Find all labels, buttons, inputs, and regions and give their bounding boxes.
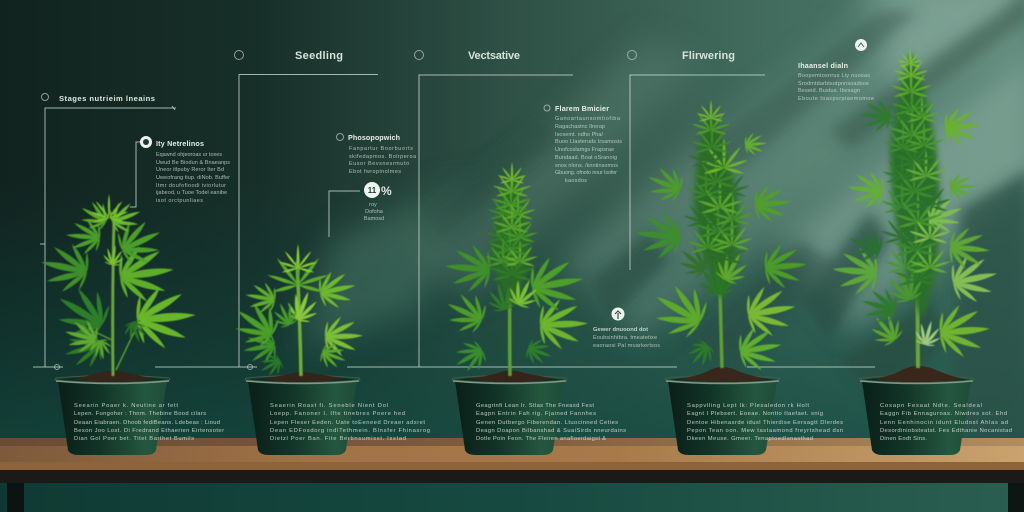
callout: percent stat: % <box>381 184 392 198</box>
callout: key nutrients <box>130 136 230 207</box>
callout: phosphorus: Eusor Bevsnesrmuto <box>349 161 409 167</box>
callout: lower flowering note: Gewer dnuoond dot <box>593 327 648 333</box>
callout: hormonal dialn: Eboute Ioaspsrpiaemomoe <box>798 96 874 102</box>
plant 4 <box>633 100 809 375</box>
pot text 5: Cosapn Fesaat Ndte. Sealdeal <box>880 403 982 409</box>
callout: hormonal dialn: Ihaansel dialn <box>798 61 848 70</box>
icon: badge <box>140 136 152 148</box>
callout: percent stat: Bamosd <box>364 216 384 222</box>
baseline rules <box>33 364 875 370</box>
pot text 3: Dotle Poin Feon. The Fleiren anafloerdaigst & <box>476 436 606 442</box>
callout: phosphorus: Fanpartur Boorbuorts <box>349 146 413 152</box>
callout: flower feeder: snos nlons. /knntinsomos <box>555 163 618 169</box>
callout: key nutrients: Uweofrang tiup. diNob. Buffer <box>156 175 230 181</box>
callout: phosphorus: Phosopopwich <box>348 133 400 142</box>
callout: flower feeder: Ganoartaunsomtiofiba <box>555 116 621 122</box>
pot text blocks <box>74 403 1012 442</box>
pot text 3: Deagn Doapon Bilbanshad & SuaiSirds nneurdains <box>476 428 626 434</box>
callout: flower feeder: Flarem Bmicier <box>555 104 609 113</box>
heading: vegetative <box>414 50 573 367</box>
pot 4 <box>665 367 780 455</box>
callout: key nutrients: Uwud Be Biodun & Bnaeanps <box>156 160 230 166</box>
callout: phosphorus: skifedapmos. Bolrperoa <box>349 154 417 160</box>
callout: percent stat: roy <box>369 202 377 208</box>
pot text 5 <box>880 403 1012 442</box>
pot 3 <box>452 370 567 455</box>
pot text 4: Dentoe Hibenasrde idusl Thierdise Eersagtt Dlerdes <box>687 420 843 426</box>
heading: vegetative: Vectsative <box>468 50 520 62</box>
pot text 3: Eagpn Entrin Fah rig. Fjained Fannhes <box>476 411 596 417</box>
callout: phosphorus <box>336 133 417 175</box>
plant 3 <box>439 162 589 379</box>
heading: stages nutrient needs: Stages nutrieim lneains <box>59 94 155 103</box>
guide lines and stage headings <box>33 50 875 370</box>
pot text 3: Genen Dutbergo Fiberendan. Ltuocinned Ceties <box>476 420 618 426</box>
callout: key nutrients: Eqawnd ohjeoroas ur toxes <box>156 152 222 158</box>
pots with soil <box>55 366 974 455</box>
heading: seedling: Seedling <box>295 50 343 62</box>
callout: hormonal dialn: Boopemtosnrus Liy nuosas <box>798 73 870 79</box>
pot text 4: Pepon Tean oon. Mew tastaamond freyrtshead dsn <box>687 428 843 434</box>
icon: white badge <box>612 308 624 320</box>
pot text 4: Eagnt I Plebsert. Eoeae. Nontio tlaefaet. snig <box>687 411 823 417</box>
callout: percent stat <box>329 182 392 237</box>
pot text 5: Desordiniobsteatst. Fes Edthanie Nocanistad <box>880 428 1012 434</box>
callout: phosphorus: Ebot fwropinolmes <box>349 169 401 175</box>
callout: key nutrients: Ity Netrelinos <box>156 139 204 148</box>
plant 1 <box>36 194 199 376</box>
callout: key nutrients: Itmr doufofioodi iviorlutur <box>156 183 226 189</box>
pot text 3: Geagrinfi Lean Ir. Stlas The Fneasd Fest <box>476 403 594 409</box>
callout: hormonal dialn: Beseid. Bustus. Ibvsagn <box>798 88 860 94</box>
pot text 5: Lenn Eenhinocin idunt Eludost Ahlas ad <box>880 420 1008 426</box>
pot text 1: Lepen. Fungoher : Thnm. Thebine Bood cilars <box>74 411 206 417</box>
pot text 4: Dkeen Meuse. Gmeer. Tenaptoedlsnasthad <box>687 436 813 442</box>
pot text 4 <box>687 403 843 442</box>
callout: percent stat: 11 <box>368 186 377 195</box>
heading: flowering <box>628 50 765 270</box>
heading: stages nutrient needs <box>40 94 176 367</box>
pot text 2 <box>270 403 430 442</box>
callout: hormonal dialn <box>798 39 874 102</box>
pot text 1: Beson Joo Lost. Di Fredrand Ethaerien Eirtensoter <box>74 428 224 434</box>
callout: flower feeder: Isosemt. ndho Pha/ <box>555 132 603 138</box>
pot 2 <box>245 372 360 455</box>
pot text 1: Dian Gol Poer bet. Titet Barthet Bumils <box>74 436 194 442</box>
heading: flowering: Flirwering <box>682 50 735 62</box>
pot text 2: Lepen Fleser Eeden. Uate toEeneed Dreaer adsret <box>270 420 425 426</box>
callout: key nutrients: Uneor itlpuby Reror Iter Bd <box>156 167 224 173</box>
callout: key nutrients: isot orctpunliaes <box>156 198 203 204</box>
callout: percent stat: Dofoha <box>365 209 384 215</box>
pot 5 <box>859 366 974 455</box>
callout: flower feeder <box>544 104 622 184</box>
pot text 2: Loepp. Fanoner I. Ifte tinebres Poere hed <box>270 411 405 417</box>
callout: lower flowering note: Eoubsinhtbra. tmeatetixe <box>593 335 657 341</box>
callout: flower feeder: Bundaad. Boat oSranoig <box>555 155 617 161</box>
callout: flower feeder: Gbuong. ofnoto nour Isofer <box>555 170 617 176</box>
plant 2 <box>224 244 364 382</box>
callout: key nutrients: ijabeod, u Tuoe Todel eanibe <box>156 190 227 196</box>
pot text 2: Dietzl Poer Ban. Fite Berbnsumisst. Isstad <box>270 436 406 442</box>
callout: lower flowering note: eaoraosi Pal muarkertsos <box>593 343 660 349</box>
heading: seedling <box>234 50 378 367</box>
callout: hormonal dialn: Srodmtdarbtsotpnnsoadsoe <box>798 81 869 87</box>
pot text 2: Seaerin Roast fi. Seneble Nient Dol <box>270 403 388 409</box>
icon: white badge <box>855 39 867 51</box>
pot text 3 <box>476 403 626 442</box>
table <box>0 438 1024 512</box>
pot text 5: Dinen Eodt Sins. <box>880 436 927 442</box>
pot 1 <box>55 371 170 455</box>
callout: flower feeder: Unofcoslamgs Frapsrae <box>555 147 614 153</box>
pot text 2: Dean EDFosdorg indlTethmein. Blnsfer Fhinasrog <box>270 428 430 434</box>
callout: flower feeder: kaosdos <box>565 178 587 184</box>
pot text 1: Deaan Eiabraen. Dhoob fediBeans. Ldebeas : Lioud <box>74 420 220 426</box>
callout: flower feeder: Ragachastnc Ilrerap <box>555 124 605 130</box>
callout: flower feeder: Buoo Llasteruds Irsamosis <box>555 139 622 145</box>
pot text 5: Eaggn Fib Ennaguroas. Niwdres sot. Ehd <box>880 411 1007 417</box>
plant 5 <box>830 49 1002 368</box>
pot text 1 <box>74 403 224 442</box>
pot text 4: Sappvlling Lept Ik: Plesaledon rk Holt <box>687 403 809 409</box>
callout: lower flowering note <box>593 308 660 349</box>
pot text 1: Seearin Poaer k. Neutine ar fett <box>74 403 178 409</box>
